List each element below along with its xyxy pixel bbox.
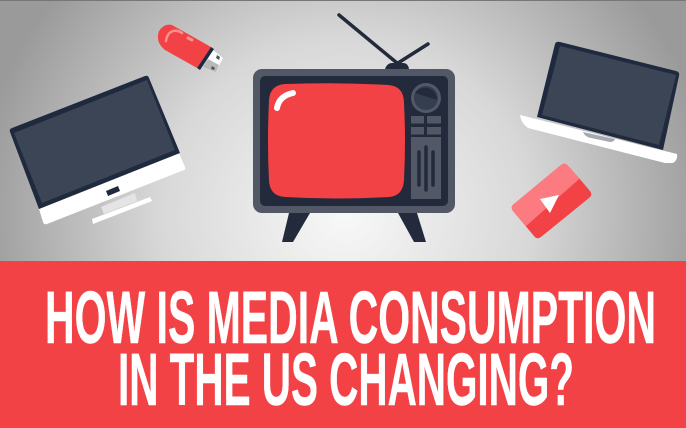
background bbox=[0, 0, 686, 262]
icon: retro television bbox=[253, 15, 455, 242]
TV body bbox=[253, 69, 455, 213]
dial bbox=[411, 83, 441, 113]
icon: desktop monitor bbox=[10, 76, 185, 224]
antennas bbox=[339, 15, 428, 69]
speaker panel bbox=[411, 137, 441, 199]
icon: laptop bbox=[520, 42, 679, 163]
title banner bbox=[0, 261, 686, 428]
title bbox=[45, 276, 656, 421]
TV screen bbox=[268, 83, 405, 198]
legs bbox=[282, 213, 426, 242]
screen highlight bbox=[277, 93, 293, 108]
icon: video play card bbox=[512, 164, 592, 238]
icon: USB drive bbox=[158, 25, 223, 72]
buttons bbox=[411, 116, 441, 134]
